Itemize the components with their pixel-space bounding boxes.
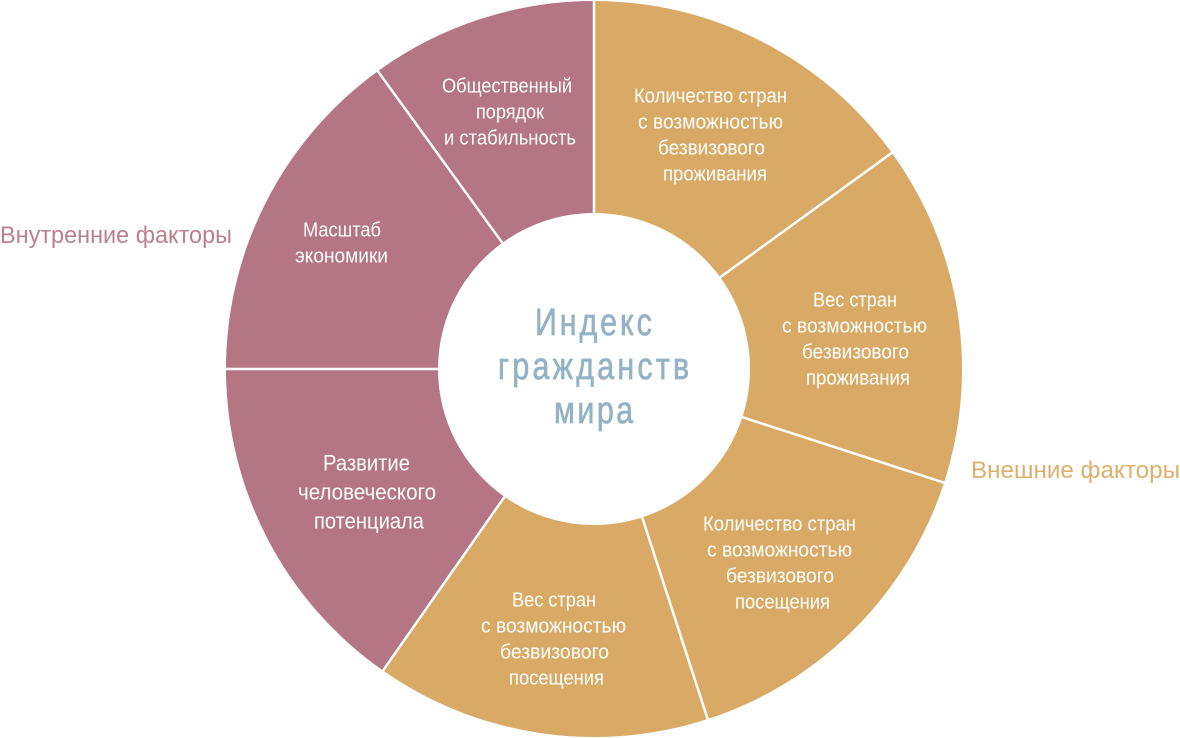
segment text: visa-free visit weight: безвизового [500,642,609,664]
segment text: visa-free residence count: с возможностью [638,112,783,134]
segment text: visa-free residence weight [782,290,927,390]
segment text: visa-free visit weight [481,590,626,690]
segment text: visa-free residence weight: Вес стран [813,290,897,312]
segment text: visa-free visit count: с возможностью [707,540,852,562]
segment text: visa-free residence count: безвизового [658,138,765,160]
segment text: human development [298,450,436,534]
center title: Индекс [535,302,652,344]
segment text: economy size: Масштаб [303,220,381,242]
label: external factors: Внешние факторы [971,457,1180,484]
center title [498,302,689,432]
segment text: visa-free visit count: посещения [735,592,830,614]
segment: human development [226,369,504,670]
segment text: public order and stability: порядок [476,102,544,124]
segment text: human development: Развитие [323,450,410,476]
segment text: public order and stability [442,76,576,150]
segment text: human development: человеческого [298,480,436,504]
segment text: visa-free residence count: проживания [663,164,767,186]
segment text: visa-free visit weight: Вес стран [512,590,596,612]
segment text: public order and stability: Общественный [442,76,572,98]
segment text: economy size [295,220,388,268]
segment text: public order and stability: и стабильность [444,128,576,150]
segment text: visa-free visit count: безвизового [726,566,834,588]
segment: public order [378,1,594,243]
segment text: visa-free visit weight: с возможностью [481,616,626,638]
segment: visa-free residence weight [720,153,962,483]
center title: гражданств [498,346,689,388]
label: internal factors: Внутренние факторы [0,222,232,249]
segment text: visa-free visit count [703,514,856,614]
segment text: visa-free residence count [634,86,787,186]
segment text: visa-free residence weight: с возможностью [782,316,927,338]
segment: economy size [226,71,502,369]
segment: visa-free visit count [642,417,944,719]
segment text: visa-free visit weight: посещения [509,668,604,690]
segment: visa-free visit weight [383,497,708,737]
segment text: visa-free residence weight: проживания [806,368,910,390]
donut chart [224,0,962,737]
segment text: visa-free residence weight: безвизового [802,342,909,364]
segment text: visa-free visit count: Количество стран [703,514,856,536]
segment text: visa-free residence count: Количество стран [634,86,787,108]
center title: мира [554,390,634,432]
segment: visa-free residence count [594,1,892,277]
segment text: human development: потенциала [314,508,425,534]
segment text: economy size: экономики [295,246,388,268]
